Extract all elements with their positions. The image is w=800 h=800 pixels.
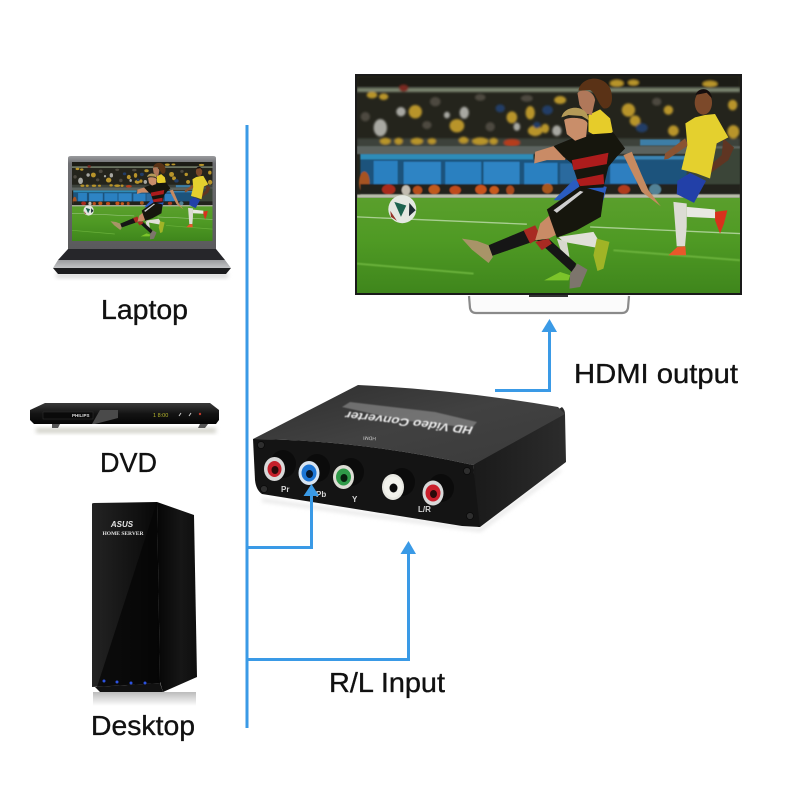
box front [253,439,480,527]
arrow: component input [247,484,319,549]
box top label [342,402,477,435]
laptop shadow [56,273,228,278]
dvd display: 1 8:00 [153,413,168,419]
dvd shadow [36,428,216,433]
product name upside down: HD Video Converter [342,409,475,435]
laptop base [53,268,231,274]
label: Desktop: Desktop [91,710,195,741]
port labels: L/R [418,505,431,514]
panel: HD video converter box [253,385,566,530]
port Pb [298,454,330,485]
dvd buttons [179,413,191,416]
laptop screen image [72,162,212,241]
panel: HDMI television [355,74,742,313]
desktop front [92,502,160,687]
label: Laptop: Laptop [101,294,188,325]
dvd tray [43,412,93,419]
desktop front diagonal [97,502,160,687]
desktop reflection [93,692,196,706]
box top [253,385,565,465]
desktop feet [95,683,163,692]
label backing [342,402,477,428]
tv screen image [357,76,740,293]
desktop status LEDs [102,680,146,684]
arrow: HDMI output [495,319,557,392]
box shadow [262,470,560,530]
port labels: Pr [281,485,289,494]
laptop keyboard [58,249,225,260]
desktop logo: ASUS [110,520,134,529]
panel: DVD player [30,403,219,433]
dvd red button [199,413,201,415]
tv brand [529,295,568,297]
dvd feet [52,424,208,428]
panel: laptop [53,156,231,278]
panel: desktop server [92,502,197,706]
corner screws [258,442,474,520]
label: DVD: DVD [100,447,157,478]
port audio L [382,468,415,500]
port labels: Pb [316,490,326,499]
port Y [333,458,364,489]
port audio R [422,474,454,506]
label: HDMI output: HDMI output [574,358,738,389]
tv stand [469,296,629,313]
laptop palm rest [53,260,231,268]
port Pr [264,450,296,481]
laptop lid [68,156,216,250]
label: R/L Input: R/L Input [329,667,445,698]
box HDMI mark: HDMI [363,434,376,441]
box side [473,407,566,527]
dvd brand: PHILIPS [72,413,90,418]
tv frame [355,74,742,295]
arrow: R/L input [247,541,416,661]
port labels [281,485,431,514]
desktop name: HOME SERVER [103,531,144,537]
dvd body [30,403,219,424]
main vertical connector [246,125,248,728]
dvd panel shine [92,410,118,424]
desktop side [157,502,197,692]
port labels: Y [352,495,358,504]
